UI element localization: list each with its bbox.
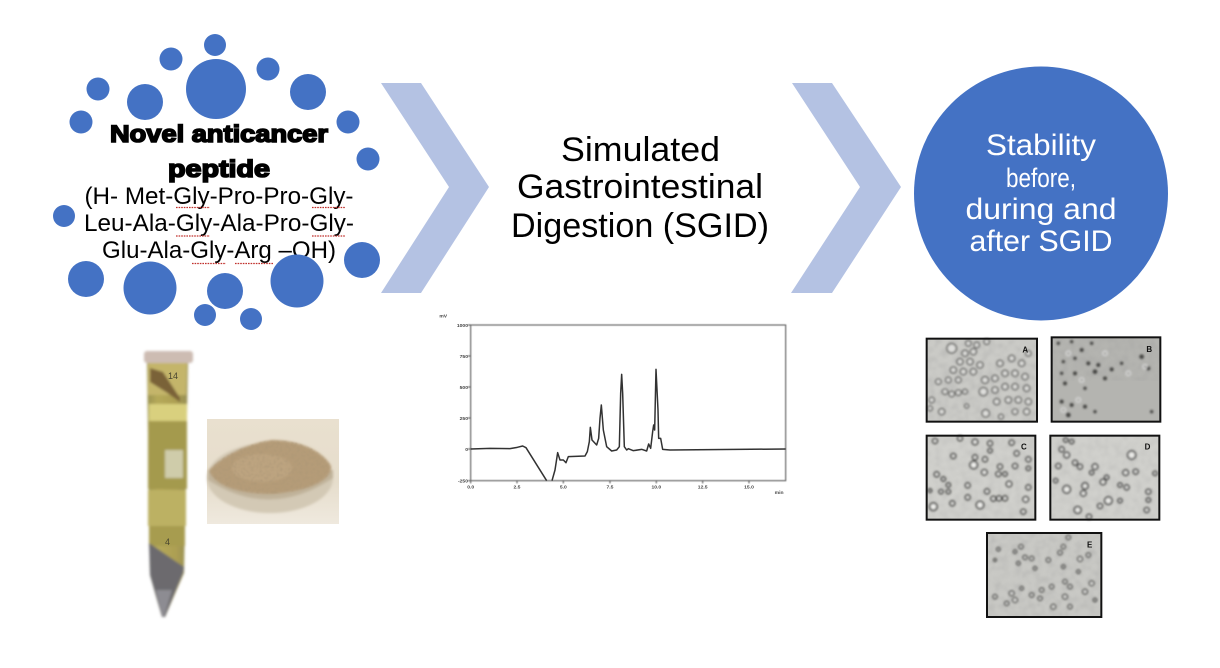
- micrograph E: [987, 533, 1101, 617]
- tube scale marks: 14: [168, 371, 178, 381]
- stability text: during and: [966, 193, 1116, 226]
- panel: novel anticancer peptide: [53, 34, 380, 330]
- micrograph B: B: [1146, 345, 1152, 354]
- axis labels: mV: [439, 313, 448, 319]
- powder grain texture: [209, 440, 331, 494]
- micrograph A: [927, 339, 1037, 422]
- panel: microscopy images: [927, 337, 1160, 617]
- micrograph C: C: [1021, 442, 1027, 451]
- peptide sequence text: (H- Met-Gly-Pro-Pro-Gly-: [84, 183, 354, 210]
- large bubble overlapping the sequence text: [270, 254, 324, 308]
- heading: simulated gastrointestinal digestion: Gastrointestinal: [517, 168, 763, 206]
- panel: stability circle: [914, 66, 1168, 320]
- peptide sequence text: Leu-Ala-Gly-Ala-Pro-Gly-: [84, 210, 354, 237]
- arrow: chevron to digestion step: [381, 83, 489, 293]
- photo: peptide powder in a dish: [207, 419, 339, 524]
- axis labels: 750: [460, 354, 468, 360]
- heading: simulated gastrointestinal digestion: Simulated: [561, 131, 720, 169]
- micrograph D: [1050, 436, 1159, 520]
- axis labels: 7.5: [607, 484, 614, 490]
- micrograph E: E: [1087, 540, 1093, 549]
- axis labels: 10.0: [651, 484, 661, 490]
- axis labels: 500: [460, 385, 468, 391]
- spell-check squiggles under the sequence: [176, 208, 345, 264]
- plot frame and ticks: [468, 325, 786, 483]
- peptide sequence text: Glu-Ala-Gly-Arg –OH): [102, 237, 336, 264]
- axis labels: 250: [460, 416, 468, 422]
- axis labels: 15.0: [744, 484, 754, 490]
- photo: centrifuge tube: [144, 351, 193, 617]
- tube scale marks: 4: [165, 537, 170, 547]
- heading: simulated gastrointestinal digestion: [511, 131, 769, 245]
- micrograph B: [1052, 337, 1160, 422]
- axis labels: 0.0: [467, 484, 474, 490]
- bubbles around the peptide label: [53, 34, 380, 330]
- stability text: before,: [1006, 163, 1076, 193]
- heading: novel anticancer peptide: Novel anticancer: [110, 121, 328, 148]
- tube scale marks: [165, 371, 178, 547]
- axis labels: min: [775, 490, 784, 496]
- stability text: Stability: [986, 129, 1096, 162]
- micrograph D: D: [1145, 442, 1151, 451]
- micrograph A: A: [1022, 346, 1028, 355]
- arrow: chevron to stability step: [791, 83, 901, 293]
- heading: novel anticancer peptide: [110, 121, 328, 183]
- axis labels: -250: [458, 479, 468, 485]
- axis labels: 12.5: [698, 484, 708, 490]
- chart: HPLC chromatogram: [439, 313, 786, 496]
- chromatogram trace: [471, 369, 786, 481]
- stability text: after SGID: [970, 225, 1112, 258]
- axis labels: 2.5: [514, 484, 521, 490]
- heading: novel anticancer peptide: peptide: [168, 156, 270, 183]
- axis labels: 5.0: [560, 484, 567, 490]
- stability text: [966, 129, 1116, 258]
- peptide sequence text: [84, 183, 354, 264]
- heading: simulated gastrointestinal digestion: Digestion (SGID): [511, 207, 769, 245]
- axis labels: [439, 313, 784, 496]
- axis labels: 1000: [457, 323, 468, 329]
- blue circle: [914, 66, 1168, 320]
- axis labels: 0: [465, 447, 468, 453]
- micrograph C: [927, 436, 1035, 520]
